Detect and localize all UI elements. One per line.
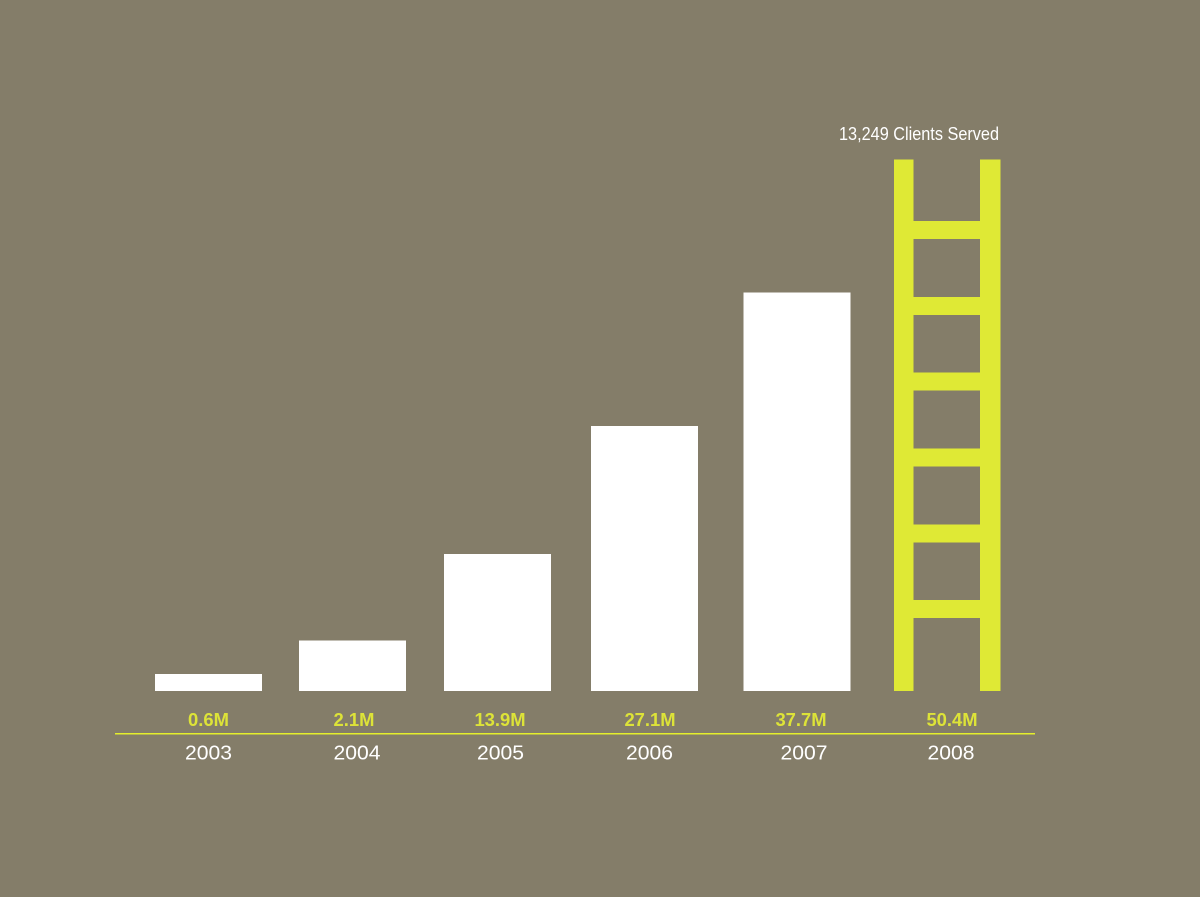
year labels: 2005 [477,742,524,764]
year labels: 2007 [780,742,828,764]
value labels: 27.1M [624,709,676,730]
year labels: 2004 [334,742,380,764]
axis line [115,733,1035,734]
icon: ladder bar 2008 [894,160,1000,691]
year labels [185,742,974,764]
year labels: 2008 [928,742,974,764]
year labels: 2003 [185,742,232,764]
value labels: 37.7M [775,709,827,730]
year labels: 2006 [626,742,673,764]
value labels [188,709,978,730]
callout: clients served: 13,249 Clients Served [839,123,999,144]
value labels: 13.9M [474,709,526,730]
value labels: 2.1M [334,709,374,730]
bars: 2003 to 2007 [155,292,850,691]
value labels: 0.6M [188,709,229,730]
value labels: 50.4M [926,709,978,730]
